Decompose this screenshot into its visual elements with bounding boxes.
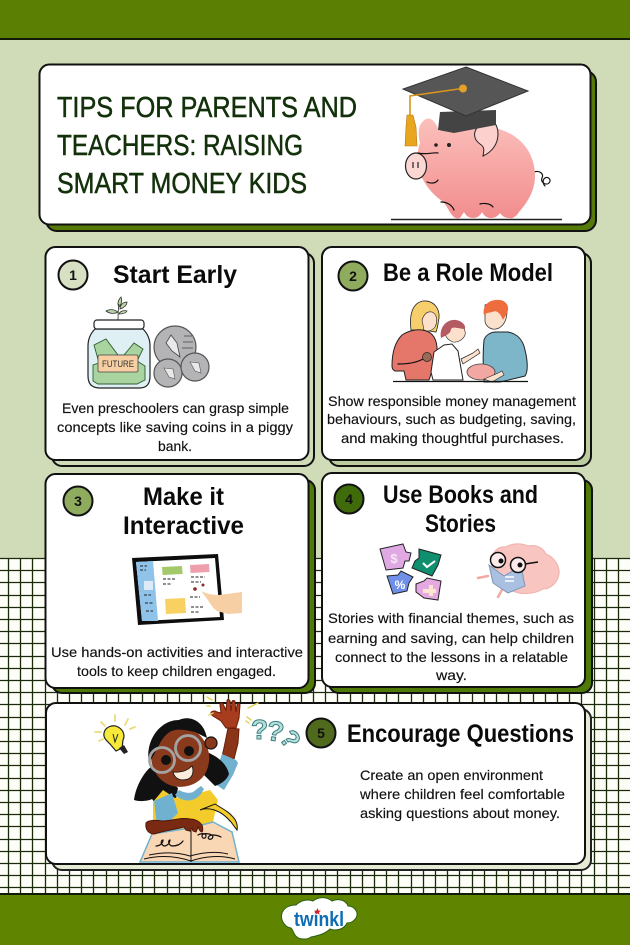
heading: Be a Role Model xyxy=(383,259,553,287)
body text xyxy=(57,400,293,454)
icon: puzzle pieces: $ xyxy=(390,551,398,566)
heading xyxy=(123,483,244,540)
heading: Stories xyxy=(425,510,496,538)
icon: question marks: ? xyxy=(273,724,307,754)
body text: way. xyxy=(435,667,467,683)
title: TIPS FOR PARENTS AND xyxy=(57,92,357,124)
icon: family saving with piggy bank xyxy=(392,300,528,382)
body text: bank. xyxy=(158,438,192,454)
body text: tools to keep children engaged. xyxy=(77,663,276,679)
panel: use books and stories xyxy=(322,473,592,693)
logo: twinkl: twinkl xyxy=(294,909,344,931)
number badge 3: 3 xyxy=(74,493,82,509)
heading: Make it xyxy=(143,483,225,511)
number badge 1: 1 xyxy=(69,267,77,283)
body text: Show responsible money management xyxy=(328,393,576,409)
title xyxy=(57,92,357,200)
icon: light bulb xyxy=(95,715,135,754)
heading: Interactive xyxy=(123,512,244,540)
body text: Use hands-on activities and interactive xyxy=(51,644,303,660)
heading: Encourage Questions xyxy=(347,720,574,748)
icon: brain reading a book xyxy=(478,544,559,597)
panel: be a role model xyxy=(322,247,591,466)
number badge 5 xyxy=(306,718,336,748)
number badge 3 xyxy=(64,486,92,516)
icon: tablet with pointing hand xyxy=(132,554,242,625)
body text: behaviours, such as budgeting, saving, xyxy=(327,411,576,427)
logo: twinkl xyxy=(281,898,357,939)
bottom band xyxy=(0,893,630,945)
body text: and making thoughtful purchases. xyxy=(341,430,564,446)
icon: question marks xyxy=(251,714,307,754)
body text: Create an open environment xyxy=(360,767,543,783)
icon: future jar and coins xyxy=(88,297,209,388)
body text: Stories with financial themes, such as xyxy=(328,610,574,626)
body text: concepts like saving coins in a piggy xyxy=(57,419,293,435)
icon: question marks: ? xyxy=(264,715,286,748)
heading: Start Early xyxy=(113,261,237,289)
title: TEACHERS: RAISING xyxy=(57,130,303,162)
icon: future jar and coins: FUTURE xyxy=(102,359,134,370)
number badge 5: 5 xyxy=(317,725,325,741)
panel: make it interactive xyxy=(46,474,315,693)
title: SMART MONEY KIDS xyxy=(57,168,307,200)
number badge 1 xyxy=(58,260,88,290)
panel: start early xyxy=(46,247,314,466)
number badge 4 xyxy=(334,484,364,514)
body text xyxy=(328,610,574,683)
body text: earning and saving, can help children xyxy=(328,630,574,646)
number badge 2: 2 xyxy=(349,268,357,284)
body text: Even preschoolers can grasp simple xyxy=(62,400,289,416)
number badge 4: 4 xyxy=(345,491,353,507)
body text: where children feel comfortable xyxy=(359,786,565,802)
icon: girl raising hand with book xyxy=(134,697,258,862)
panel: title xyxy=(40,64,596,231)
number badge 2 xyxy=(338,262,368,290)
icon: question marks: ? xyxy=(251,714,268,745)
body text: connect to the lessons in a relatable xyxy=(335,649,568,665)
body text xyxy=(327,393,576,446)
icon: puzzle pieces xyxy=(380,544,441,600)
icon: piggy bank with graduation cap xyxy=(391,67,562,220)
body text xyxy=(51,644,303,679)
panel: encourage questions xyxy=(46,697,591,870)
icon: puzzle pieces: % xyxy=(395,578,406,592)
body text: asking questions about money. xyxy=(360,805,560,821)
body text xyxy=(359,767,565,821)
heading: Use Books and xyxy=(383,481,538,509)
heading xyxy=(383,481,538,538)
top band xyxy=(0,0,630,40)
